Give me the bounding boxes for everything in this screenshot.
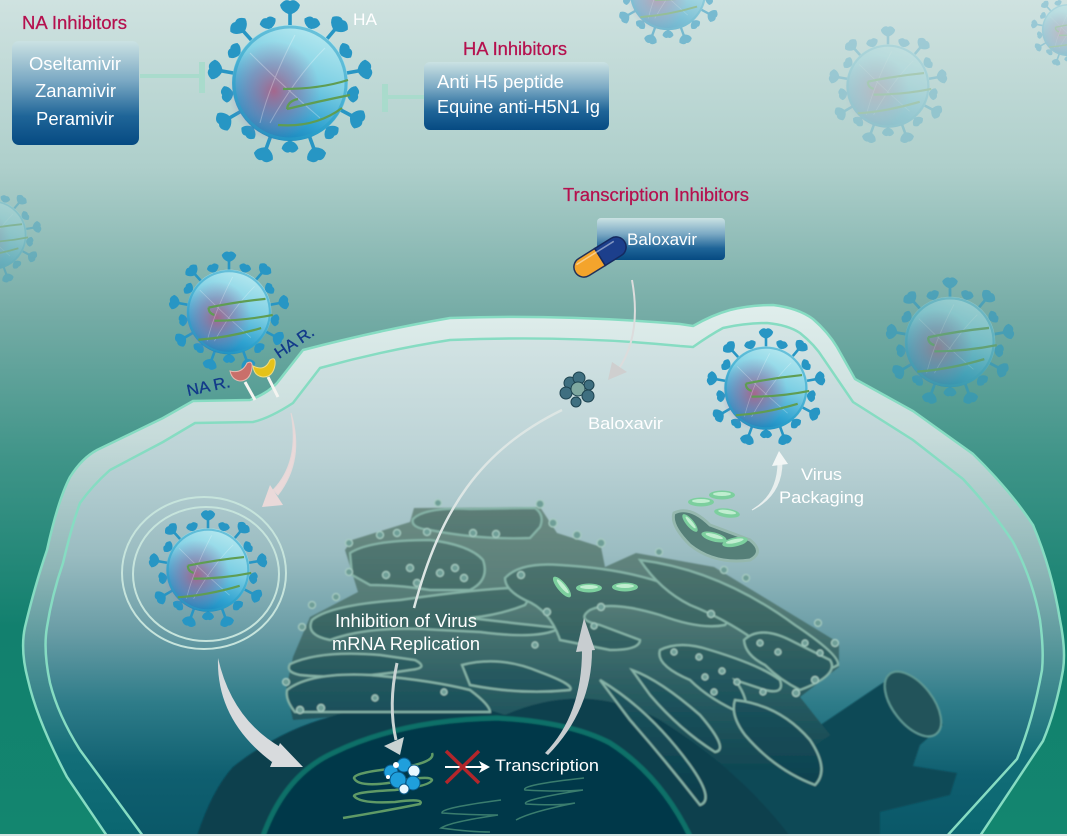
- virus: packaged: [702, 324, 831, 451]
- vesicles in golgi: [550, 574, 638, 600]
- arrow: blocked transcription: [445, 761, 490, 773]
- Virus Packaging label: Virus: [801, 465, 842, 484]
- icon: polymerase molecule: [384, 758, 420, 794]
- NA Inhibitors heading: NA Inhibitors: [22, 13, 127, 33]
- panel: Baloxavir box: Baloxavir: [627, 230, 697, 249]
- golgi silhouette: [286, 507, 839, 770]
- panel: NA inhibitor list: Oseltamivir: [29, 54, 121, 74]
- inhibition bar: HA: [382, 84, 424, 112]
- arrow: transcription to golgi: [545, 618, 595, 755]
- arrow: endocytosis: [262, 413, 296, 507]
- virus: main: [201, 0, 380, 171]
- icon: NA receptor: [230, 362, 255, 400]
- arrow: packaging: [752, 451, 788, 510]
- dark lower mass: [197, 680, 957, 836]
- panel: NA inhibitor list: [12, 41, 139, 145]
- panel: NA inhibitor list: Peramivir: [36, 109, 114, 129]
- HA Inhibitors heading: HA Inhibitors: [463, 39, 567, 59]
- inhibition bar: NA: [140, 62, 205, 93]
- cell membrane: [23, 305, 1064, 836]
- Transcription label: Transcription: [495, 756, 599, 775]
- panel: Baloxavir box: [597, 218, 725, 260]
- bottom edge: [0, 834, 1067, 836]
- Inhibition of Virus mRNA Replication label: [332, 611, 480, 654]
- HA receptor label: HA R.: [272, 324, 318, 362]
- golgi and nucleus: [197, 500, 957, 836]
- Virus Packaging label: [779, 465, 864, 507]
- icon: red cross: [446, 751, 479, 783]
- endosome with virus: [122, 497, 286, 649]
- virus: attaching: [164, 247, 294, 376]
- nucleus ring: [263, 718, 690, 836]
- Baloxavir label: Baloxavir: [588, 414, 663, 433]
- panel: HA inhibitor list: [424, 62, 609, 130]
- cylinder tube: [874, 662, 952, 746]
- golgi cisternae: [287, 508, 838, 805]
- icon: HA receptor: [253, 359, 278, 397]
- arrow: drug entry: [608, 280, 635, 380]
- panel: NA inhibitor list: Zanamivir: [35, 81, 116, 101]
- panel: HA inhibitor list: Equine anti-H5N1 Ig: [437, 97, 600, 117]
- icon: Baloxavir molecule: [560, 372, 594, 407]
- Inhibition of Virus mRNA Replication label: mRNA Replication: [332, 634, 480, 654]
- Inhibition of Virus mRNA Replication label: Inhibition of Virus: [335, 611, 477, 631]
- HA label: HA: [353, 10, 378, 29]
- faint background viruses: [0, 0, 1067, 411]
- faint RNA strands: [441, 778, 584, 832]
- panel: HA inhibitor list: Anti H5 peptide: [437, 72, 564, 92]
- icon: capsule: [570, 233, 630, 281]
- arrow: to nucleus: [218, 658, 303, 767]
- arrow: replication to Baloxavir: [414, 410, 562, 608]
- NA receptor label: NA R.: [185, 374, 232, 400]
- arrow: replication to nucleus: [384, 663, 404, 755]
- viral RNA helix: [343, 753, 432, 818]
- golgi granules: [282, 500, 838, 714]
- Transcription Inhibitors heading: Transcription Inhibitors: [563, 185, 749, 205]
- vesicle capsule with particles: [673, 490, 758, 561]
- Virus Packaging label: Packaging: [779, 488, 864, 507]
